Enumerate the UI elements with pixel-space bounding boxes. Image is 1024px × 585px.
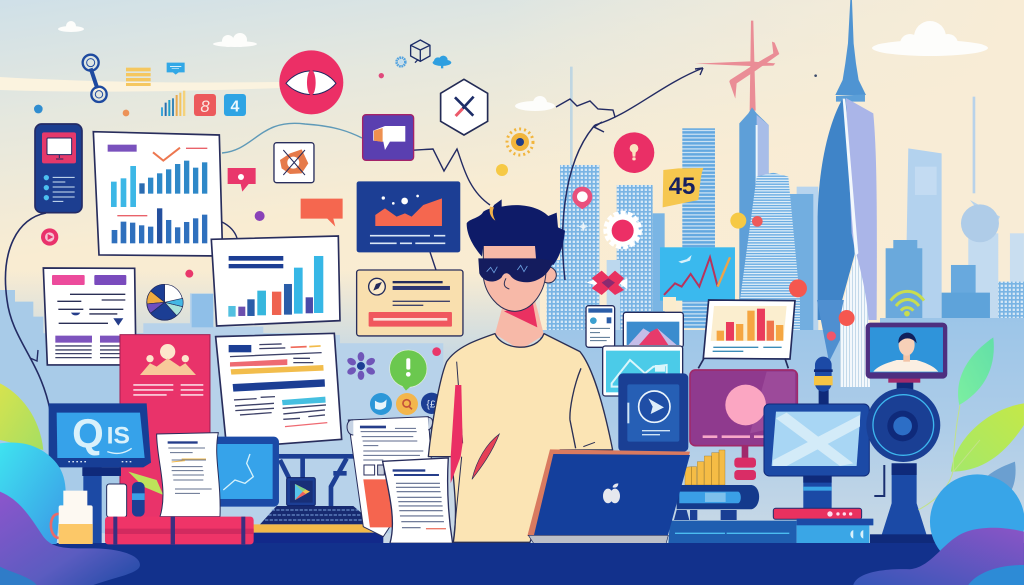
cyan landscape card <box>603 346 683 396</box>
purple monitor <box>690 370 797 480</box>
icon: yellow tile <box>663 168 703 207</box>
panel: report page back <box>347 417 433 537</box>
leaves right <box>918 337 1024 510</box>
tile: blue <box>224 94 246 116</box>
panel: curled document <box>157 433 220 517</box>
icon: flower <box>346 352 376 380</box>
base boxes <box>668 519 938 544</box>
panel: QIS monitor <box>49 403 151 476</box>
skyline: right buildings <box>547 0 1024 461</box>
skyline: left <box>0 290 443 533</box>
panel: QIS monitor: Q <box>72 410 104 456</box>
bar chart tablet <box>698 300 795 368</box>
wifi icon <box>891 291 924 315</box>
icon: twitter <box>370 393 392 415</box>
icon: eye <box>279 50 343 114</box>
leaf ear <box>987 462 1016 490</box>
icon: gear <box>607 214 639 246</box>
tile: blue: 4 <box>231 99 240 116</box>
scaffold frame <box>280 458 347 507</box>
tablet play <box>618 373 688 452</box>
tile: red <box>194 94 216 116</box>
microphone <box>814 357 833 404</box>
icon: gear <box>397 58 405 66</box>
video call screen <box>866 323 947 379</box>
lower-left desk items <box>49 403 453 545</box>
panel: growth chart card <box>211 236 340 326</box>
desk row left <box>0 383 254 585</box>
icon: red speech bubble <box>301 199 343 227</box>
icon: alert bubble <box>390 350 427 391</box>
right desk items <box>527 279 947 544</box>
sun icon <box>507 129 533 155</box>
icon: play store tile <box>287 478 315 506</box>
hair highlight <box>490 207 495 221</box>
inner wave <box>968 565 1024 585</box>
sunglasses <box>478 258 553 289</box>
panel: announcement card <box>363 115 414 160</box>
icon: play button <box>41 228 58 246</box>
panel: phone card <box>35 124 82 213</box>
shirt <box>428 334 613 542</box>
stem <box>918 405 980 510</box>
icon: search <box>396 393 418 415</box>
panel: audience pink card <box>120 335 210 527</box>
connector lines <box>5 68 703 410</box>
camera device <box>866 377 940 535</box>
cream gap <box>663 297 676 311</box>
mountain card <box>623 312 683 347</box>
dots <box>730 74 817 229</box>
red deck <box>773 508 862 519</box>
laptop <box>527 449 690 544</box>
panel: cyan line chart <box>660 247 735 301</box>
panel: keyboard laptop <box>250 506 385 544</box>
circle blob <box>930 474 1024 569</box>
social icons <box>346 347 441 391</box>
leaf: lime <box>0 383 43 450</box>
panel: report page front <box>383 458 453 543</box>
icon: yellow tile: 45 <box>669 173 695 200</box>
stand under monitor <box>83 463 102 545</box>
icon: stacked lines <box>126 68 151 86</box>
leaf: mint <box>958 337 994 405</box>
top icons <box>83 40 488 135</box>
icon: location pin <box>572 187 592 232</box>
left cards <box>34 105 463 365</box>
head <box>483 245 556 311</box>
tower base <box>817 253 870 387</box>
panel: QIS monitor: IS <box>107 422 130 449</box>
pens <box>107 482 145 517</box>
icon: pink diamonds <box>587 271 627 295</box>
panel: document card <box>43 268 136 365</box>
icon: star badge <box>274 143 314 183</box>
jar <box>51 491 93 544</box>
blob: cyan <box>0 442 66 544</box>
panel: area chart card <box>357 181 460 252</box>
panel: tablet <box>208 437 279 507</box>
small phone card <box>586 306 615 347</box>
pink case <box>105 517 254 544</box>
main spire <box>818 0 877 320</box>
pink wind turbine <box>695 21 779 111</box>
panel: profile note card <box>357 270 463 336</box>
icon: chat bubble <box>167 63 185 75</box>
leaf: lime <box>951 403 1024 472</box>
icon: link chain <box>83 55 107 102</box>
hair <box>467 199 565 265</box>
haze band <box>0 77 340 92</box>
icon: cube <box>411 40 430 63</box>
blob: purple <box>0 492 140 585</box>
icon: hexagon x <box>441 79 488 135</box>
center monitor <box>764 404 869 510</box>
panel: bar chart card <box>93 132 223 256</box>
icon: speech pin <box>228 168 256 192</box>
blobs right <box>853 462 1024 585</box>
person <box>428 199 613 542</box>
clouds <box>58 21 988 111</box>
panel: text report card <box>216 333 342 448</box>
tile: red: 8 <box>200 97 210 116</box>
purple wave <box>853 528 1024 585</box>
icon: cloud <box>433 56 451 68</box>
mini bar chart <box>161 91 185 116</box>
skyline floating icons <box>572 74 817 301</box>
gold steps <box>685 450 725 485</box>
icon: navy badge: {£ <box>427 399 436 410</box>
neck <box>495 300 544 350</box>
router <box>674 485 759 520</box>
desk <box>0 543 1024 585</box>
ground haze right <box>540 318 1024 545</box>
icon: bulb badge <box>614 132 654 173</box>
chart: pie <box>147 284 183 320</box>
